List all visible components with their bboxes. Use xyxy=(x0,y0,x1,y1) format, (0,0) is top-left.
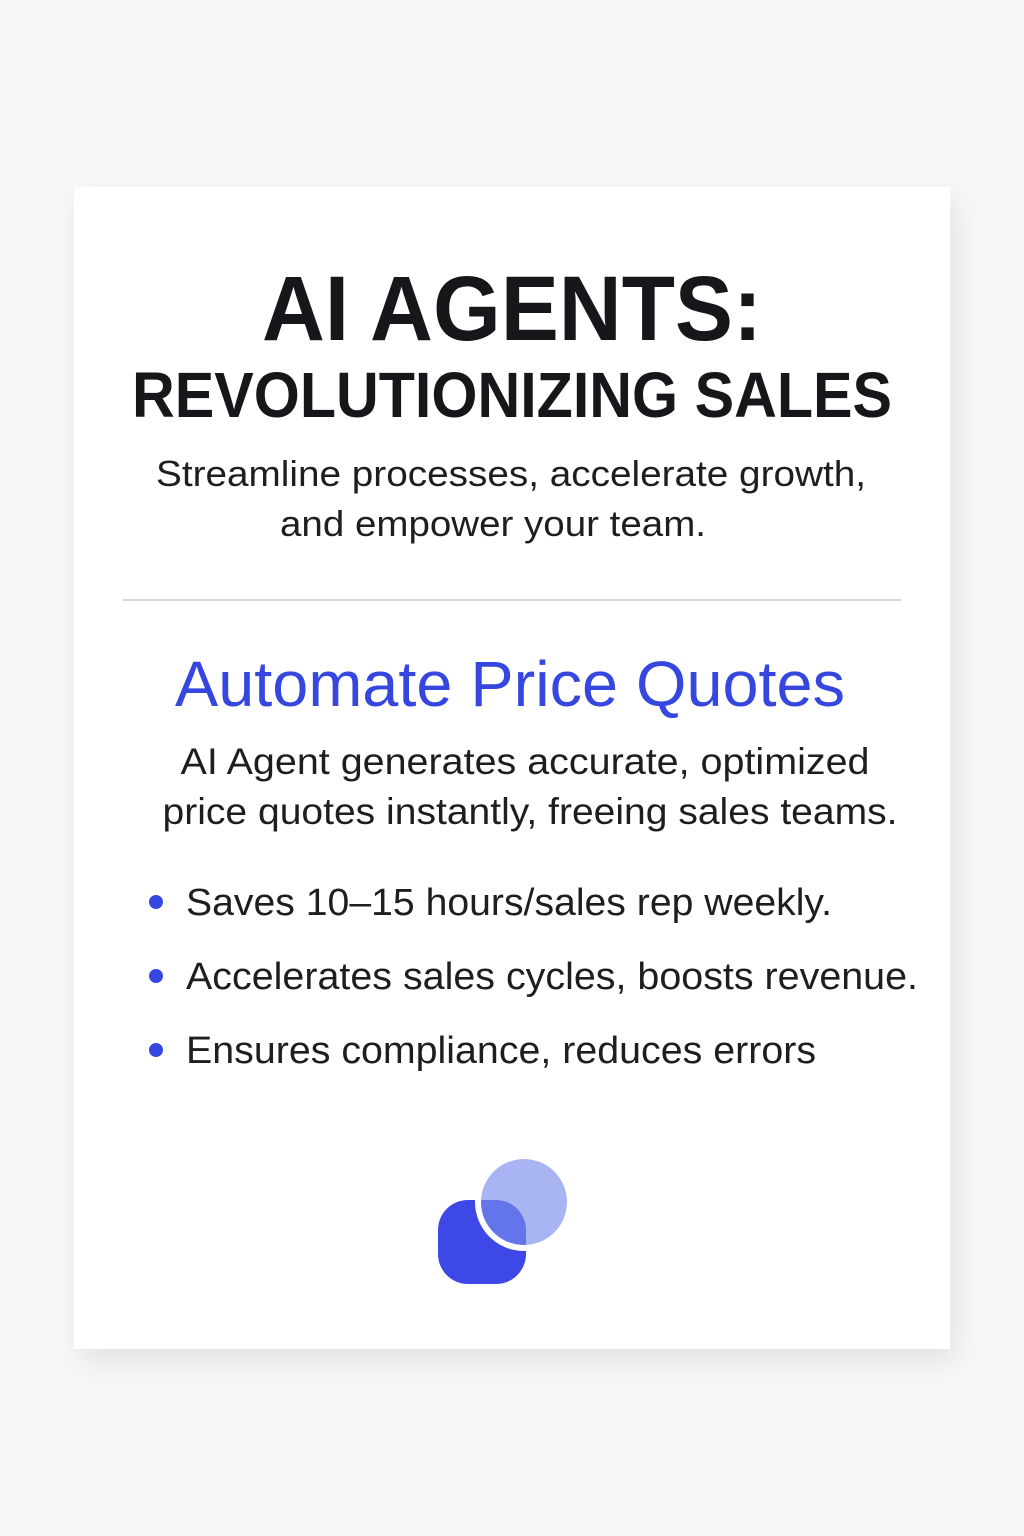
description xyxy=(162,741,898,832)
icon: logo xyxy=(438,1153,573,1284)
subtitle heading: REVOLUTIONIZING SALES xyxy=(132,359,892,431)
tagline xyxy=(156,453,866,544)
description: AI Agent generates accurate, optimized xyxy=(180,741,870,782)
tagline: Streamline processes, accelerate growth, xyxy=(156,453,866,494)
bullet list: Ensures compliance, reduces errors xyxy=(186,1030,816,1072)
tagline: and empower your team. xyxy=(280,503,706,544)
bullet list: Accelerates sales cycles, boosts revenue. xyxy=(186,956,918,998)
title: AI AGENTS: xyxy=(262,258,762,360)
section heading: Automate Price Quotes xyxy=(175,648,845,720)
bullet list: Saves 10–15 hours/sales rep weekly. xyxy=(186,882,832,924)
description: price quotes instantly, freeing sales teams. xyxy=(162,791,898,832)
panel: card xyxy=(74,187,950,1349)
bullet list xyxy=(149,882,918,1072)
